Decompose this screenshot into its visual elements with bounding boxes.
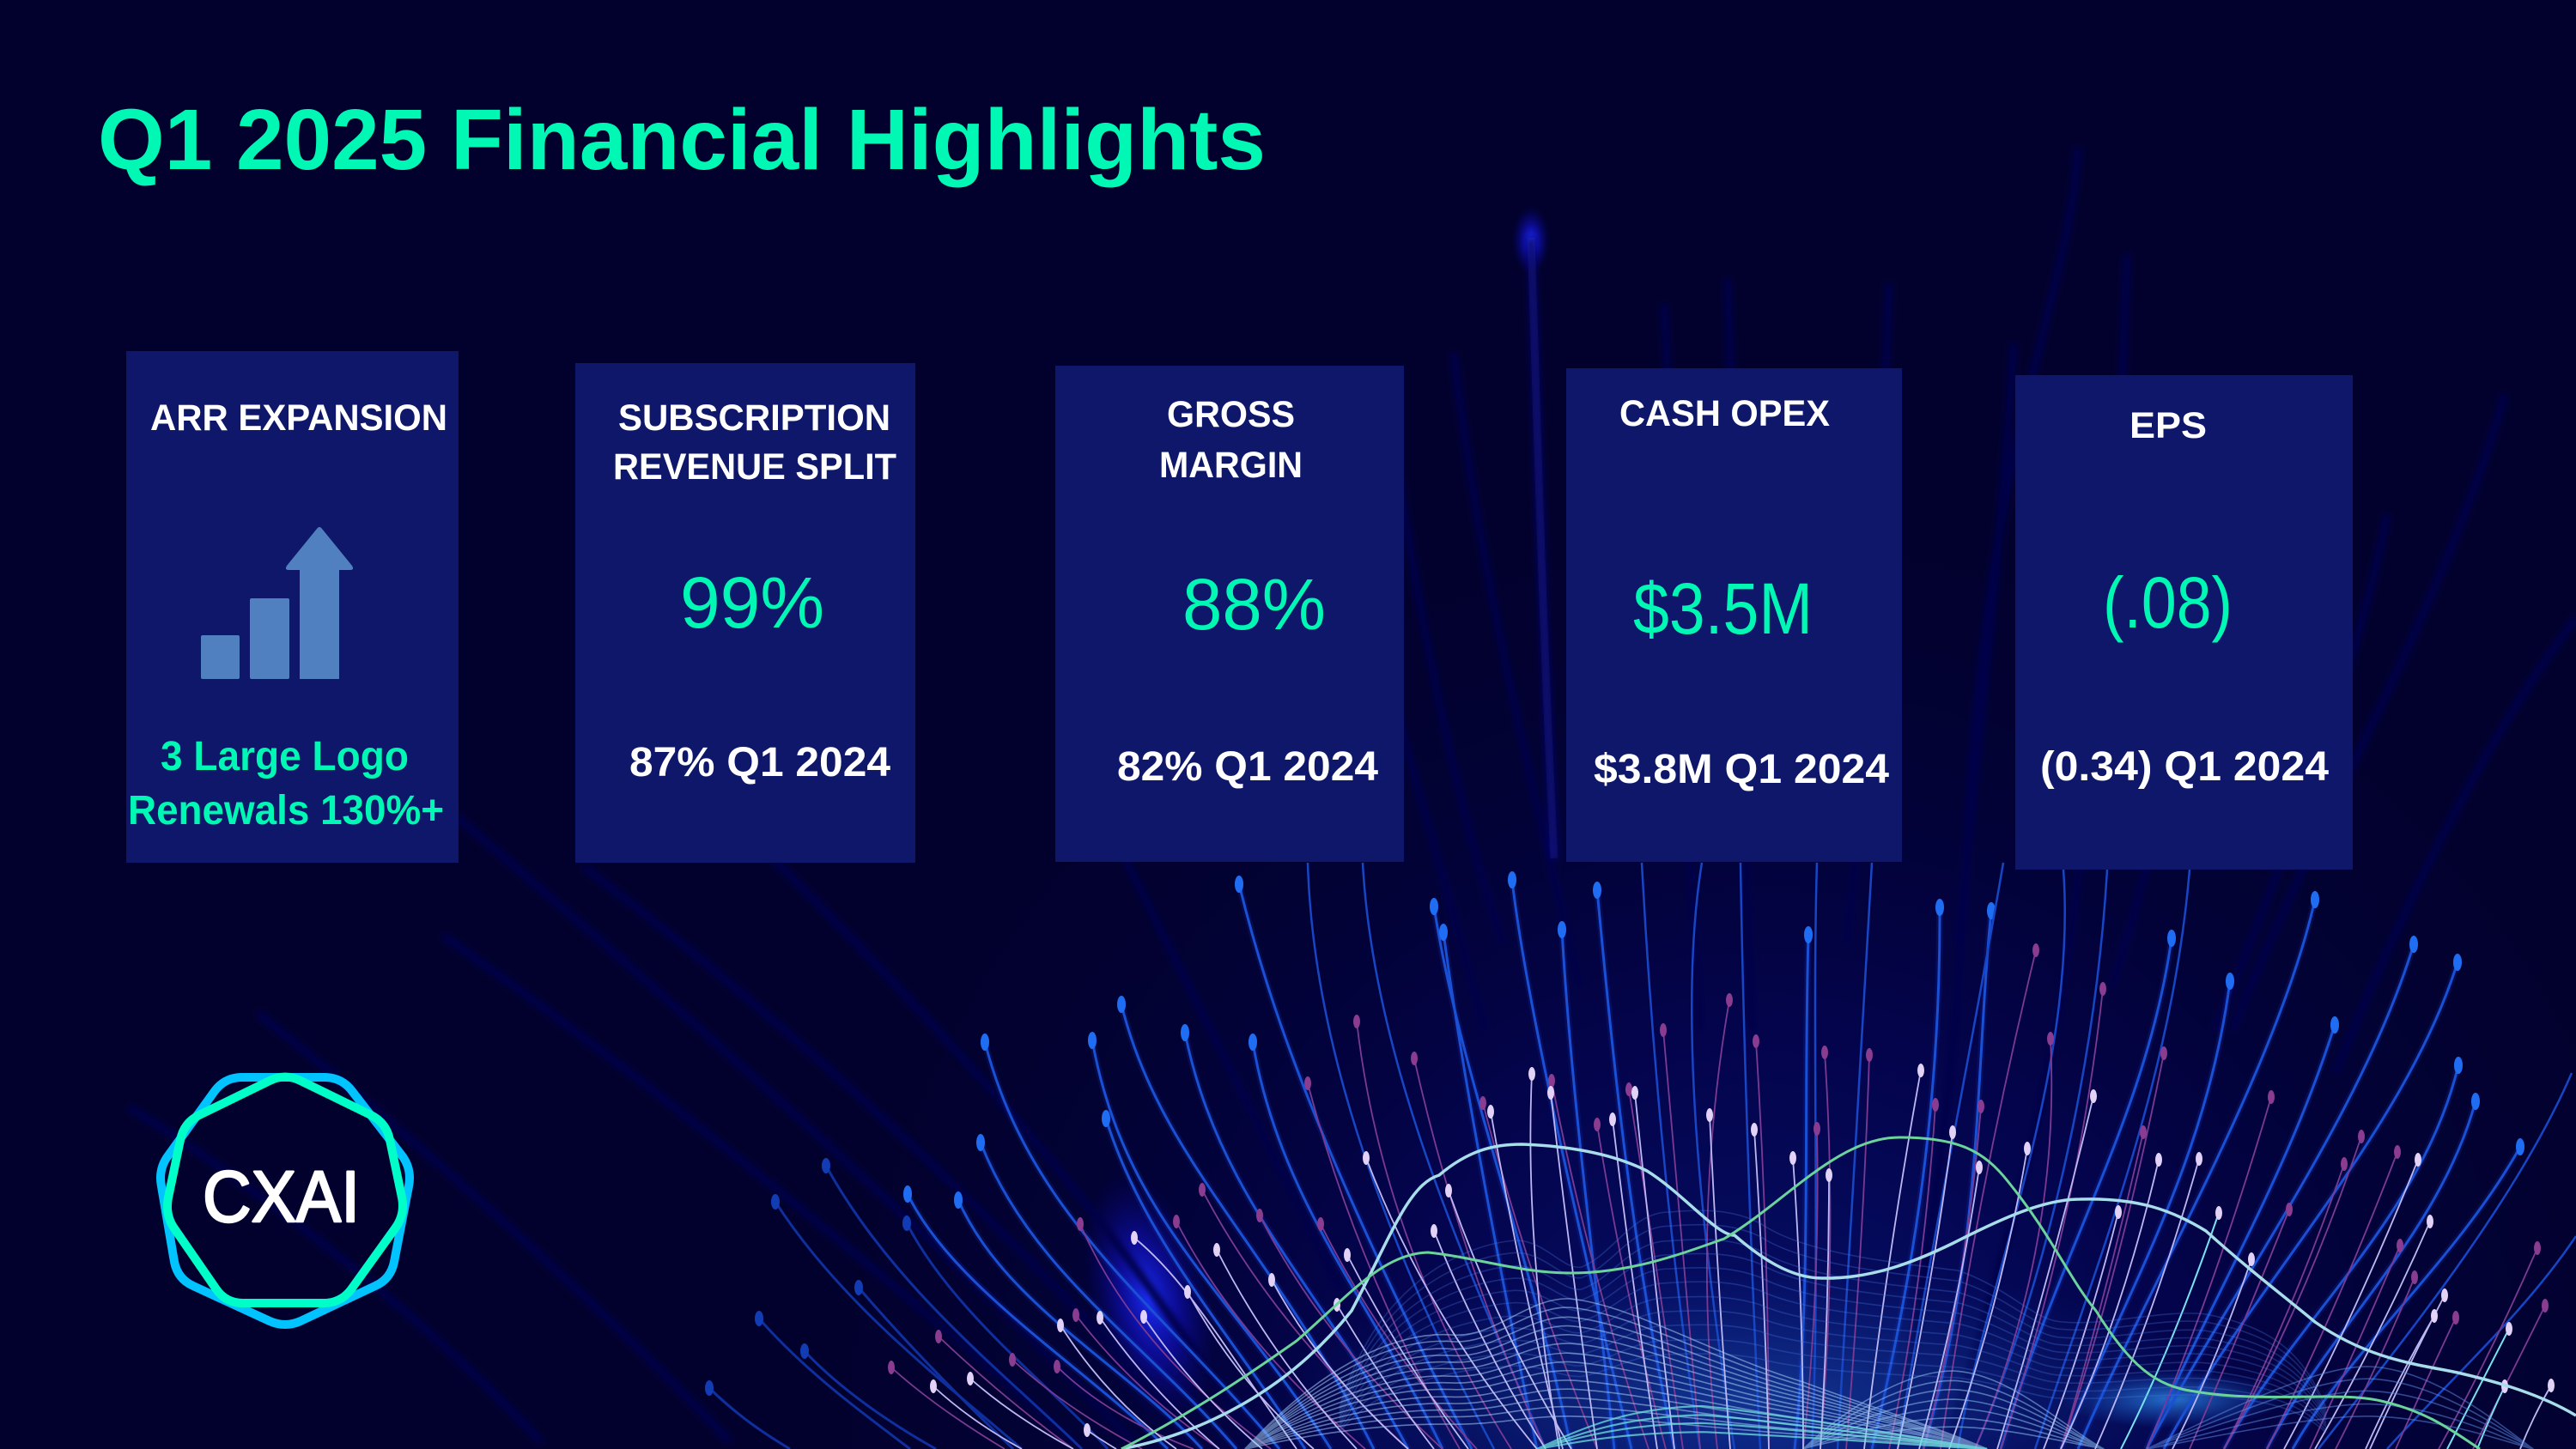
data mesh waves [1245,1210,2533,1449]
prior year: 82%: 82% Q1 2024 [1117,744,1378,790]
white and pink strands [933,1070,2551,1449]
callout: large logo renewals: 3 Large Logo [161,734,409,779]
prior year: (0.34): (0.34) Q1 2024 [2040,744,2329,790]
curve: white-teal line [1121,1144,2576,1449]
curve: green line [1121,1137,2480,1449]
heading: ARR expansion: ARR EXPANSION [150,397,447,439]
panel: subscription revenue split [575,363,915,863]
dim far-left strands [709,1166,1108,1449]
heading: EPS: EPS [2129,405,2207,446]
panel: gross margin [1055,366,1404,862]
panel: cash opex [1566,368,1902,862]
title: Q1 2025 Financial Highlights [98,92,1266,188]
cyan strands [2121,1213,2509,1449]
value: 99%: 99% [680,562,824,643]
heading: subscription revenue split: SUBSCRIPTION [618,397,890,439]
heading: gross margin: MARGIN [1159,445,1303,486]
heading: subscription revenue split [613,397,896,488]
callout: large logo renewals: Renewals 130%+ [128,788,444,834]
heading: cash opex: CASH OPEX [1619,393,1830,434]
value: 88%: 88% [1182,564,1326,645]
callout: large logo renewals [128,734,444,834]
value: $3.5M: $3.5M [1633,568,1813,649]
icon: rising bars with arrow [201,527,353,679]
logo: CXAI [161,1076,410,1325]
heading: gross margin [1159,394,1303,486]
blue strands [908,880,2520,1449]
prior year: 87%: 87% Q1 2024 [629,740,890,785]
panel: EPS [2015,375,2353,870]
panel: ARR expansion [126,351,459,863]
blue strands continuing behind the cards [1308,863,2576,1449]
heading: subscription revenue split: REVENUE SPLIT [613,446,896,488]
prior year: $3.8M: $3.8M Q1 2024 [1594,747,1889,792]
logo: CXAI: CXAI [203,1156,360,1237]
heading: gross margin: GROSS [1167,394,1295,435]
purple strands [891,950,2545,1449]
value: (.08): (.08) [2103,562,2233,643]
